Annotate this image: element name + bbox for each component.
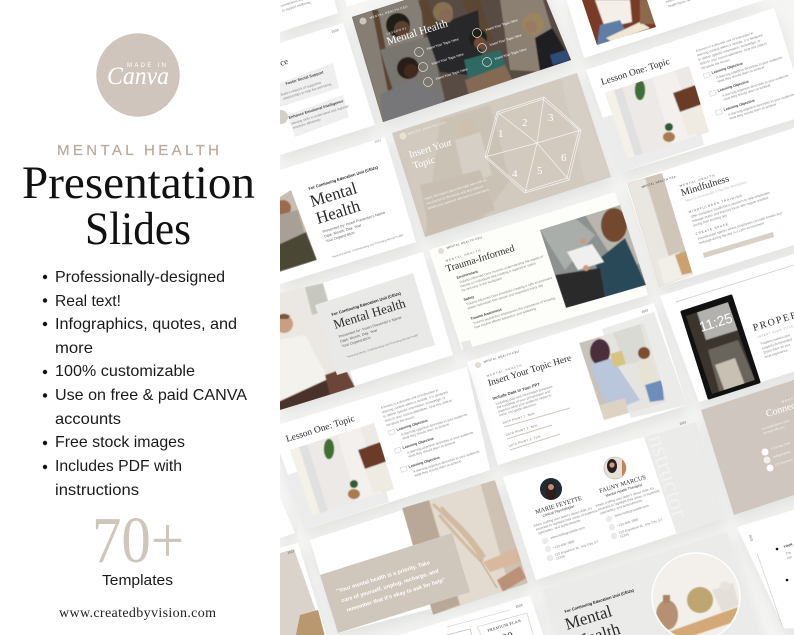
heading	[408, 137, 454, 172]
circular photo	[652, 553, 740, 635]
text block: MINDFULNESS TRAINING	[688, 193, 743, 214]
slide: partial top left	[280, 0, 372, 32]
title text: Presented by: Insert Presenter's Name	[322, 211, 386, 234]
photo: man with book	[582, 0, 656, 45]
grey card: Your Organization	[341, 336, 371, 349]
instructor two: specialties, and achievements.	[600, 498, 644, 515]
feature list: Infographics, quotes, and	[55, 316, 237, 333]
premium plan box	[477, 613, 536, 635]
contact icons: 123 Anywhere	[774, 457, 794, 467]
count: 70+: 70+	[92, 504, 184, 577]
instructor two	[595, 455, 664, 539]
hexagon diagram: 4	[512, 168, 518, 180]
paragraph: learning content within a module. It is designed	[381, 390, 448, 414]
faded photo background	[420, 76, 568, 237]
text block: during their working day	[693, 213, 728, 228]
learning objectives: Learning Objective	[711, 62, 743, 75]
logo	[400, 132, 406, 140]
learning objectives: A learning objective describes to your audience	[407, 430, 474, 455]
paragraph: A lesson is a discrete unit of instruction in	[695, 31, 754, 53]
instructor two: 12345	[619, 532, 629, 539]
learning objectives: Learning Objective	[723, 99, 755, 112]
learning objectives: A learning objective describes to your audience	[728, 92, 794, 117]
instructor one: 123 Anywhere St., Any City, ST	[554, 540, 599, 557]
title text: Mental	[563, 601, 614, 634]
learning objectives: A learning objective describes to your audience	[401, 412, 468, 437]
learning objectives: Learning Objective	[396, 419, 428, 432]
title text: "Nurturing Minds: Understanding and Promoting Mental Health"	[331, 233, 404, 259]
body text: Trauma-Informed Care involves understanding the impact of	[459, 254, 544, 284]
slide: mental health with circle photo	[542, 532, 762, 635]
card: enhance emotional intelligence: Develop skills to understand and regulate	[290, 104, 349, 126]
grey card: "Nurturing Minds: Understanding and Promoting Mental Health"	[346, 333, 419, 359]
card: foster social support	[280, 63, 339, 107]
slide: bullets partial right: can	[786, 555, 793, 560]
slide: small partial left	[280, 498, 295, 538]
slide: phone mockup property	[660, 252, 794, 402]
slide: insert your topic with photo: 2023	[641, 308, 649, 314]
slide: insert your topic with photo: MENTAL HEALTH CEU	[483, 349, 520, 364]
grey card: For Continuing Education Unit (CEUs)	[331, 290, 402, 317]
learning objectives: Learning Objective	[717, 80, 749, 93]
instructor two: 123 Anywhere St., Any City, ST	[618, 518, 663, 535]
learning objectives: what they should learn to achieve	[414, 459, 462, 478]
heading: Insert Your	[408, 137, 454, 161]
photo: counselling session	[579, 324, 666, 420]
slide: mental health title with photo: 2023	[374, 138, 382, 144]
photo: woman with glasses	[280, 283, 355, 410]
photo: white room with plant	[290, 423, 394, 516]
learning objectives: A learning objective describes to your audience	[722, 73, 789, 98]
label: templates: Templates	[102, 572, 173, 589]
slide: beige connect: we would love to hear	[761, 419, 790, 431]
slide: quote	[310, 475, 530, 633]
grey card: Date: Month, Day, Year	[340, 328, 379, 344]
paragraph: introduction to the lesson and any relevant	[426, 184, 484, 206]
body text: Trauma Awareness	[470, 307, 502, 321]
text block: MENTAL HEALTH	[679, 173, 716, 188]
paragraph: introduce the lesson.	[386, 415, 416, 428]
data points: DATA POINT 1: 55%	[502, 411, 535, 425]
paragraph: learning content within a module. It is designed	[696, 33, 763, 57]
text block: How to incorporate it into the Workplace	[685, 180, 747, 203]
photo: pampas grass	[400, 475, 530, 620]
title text: Health	[314, 196, 363, 228]
instructor one: essential to highlight their areas of expertise,	[535, 508, 599, 532]
learning objectives: what they should learn to achieve	[408, 440, 456, 459]
topic list: Insert Your Topic Here	[431, 52, 464, 66]
learning objectives: what they should learn to achieve	[723, 83, 771, 102]
data text	[492, 381, 557, 417]
slide: trauma-informed: MENTAL HEALTH CEU	[446, 235, 483, 250]
heading: Mental Health	[385, 17, 450, 48]
slide: beige connect: connect with you	[762, 425, 785, 435]
feature list: Professionally-designed	[55, 269, 225, 286]
slide: beige connect	[701, 378, 794, 515]
data points	[502, 408, 570, 450]
slide: bullets partial right: 2023	[748, 534, 754, 542]
body text: Environment	[456, 269, 479, 280]
slide: bullets partial right: YOUR	[783, 542, 794, 549]
slide: instructors	[503, 420, 724, 580]
card: foster social support: Foster Social Support	[285, 70, 325, 86]
feature list: Includes PDF with	[55, 458, 182, 475]
slide: pricing partial bottom	[350, 595, 548, 635]
card: enhance emotional intelligence: emotions effectively	[292, 117, 322, 130]
learning objectives: Learning Objective	[402, 437, 434, 450]
slide: beige hexagon diagram: MENTAL HEALTH CEU	[407, 120, 446, 136]
body text: trauma on individuals and creating a supportive space	[460, 261, 536, 289]
logo	[475, 362, 481, 368]
photo: woman	[280, 190, 317, 272]
title: local experience.	[764, 348, 789, 359]
heading: Lesson One: Topic	[285, 414, 356, 445]
feature list: 100% customizable	[55, 363, 195, 380]
topic list: Insert Your Topic Here	[426, 37, 459, 51]
instructor one	[533, 478, 600, 561]
heading: Trauma-Informed	[445, 243, 516, 275]
instructor one: www.reallygreatsite.com	[550, 525, 585, 540]
logo	[438, 248, 444, 254]
hexagon diagram: 6	[561, 152, 567, 164]
icon: grey circle	[274, 110, 288, 124]
card: foster social support: Build a network of supportive	[280, 80, 322, 97]
phone: 11:25	[697, 309, 735, 335]
data text: know, and guide decisions.	[499, 402, 538, 417]
contact icons: +123-456-7890	[770, 441, 791, 451]
heading: MENTAL HEALTH	[445, 248, 482, 263]
feature list: more	[55, 340, 93, 357]
slide: beige hexagon diagram	[392, 73, 611, 237]
slide: dark mental health photo	[352, 0, 571, 127]
title	[22, 157, 255, 255]
photo: white room with plant	[605, 66, 709, 159]
slide: dark mental health photo: MENTAL HEALTH CEU	[369, 4, 408, 20]
card: enhance emotional intelligence: Enhance Emotional Intelligence	[288, 99, 344, 120]
data points: DATA POINT 3: 75%	[508, 434, 541, 448]
grey card	[315, 273, 435, 375]
instructor one: 12345	[555, 554, 565, 561]
title text: For Continuing Education Unit (CEUs)	[564, 587, 635, 614]
slide: bedroom partial lower left	[280, 543, 328, 635]
paragraph: A lesson is a discrete unit of instruction in	[380, 388, 439, 410]
paragraph: to deliver specific information, knowledge, or	[698, 38, 762, 62]
learning objectives: what they should learn to achieve	[717, 65, 765, 84]
slide: lesson one topic, lower left	[271, 367, 490, 529]
card: enhance emotional intelligence	[288, 95, 351, 137]
photo: beige interior	[627, 173, 693, 287]
topic list	[414, 18, 527, 87]
logo	[360, 18, 366, 24]
body text: how trauma affects behaviour and wellbeing	[474, 307, 537, 330]
instructor two: essential to highlight their areas of expertise,	[597, 488, 661, 512]
title: property documented	[761, 337, 793, 350]
website: www.createdbyvision.com	[59, 606, 216, 621]
learning objectives: Learning Objective	[408, 456, 440, 469]
quote box: "Your mental health is a priority. Take	[336, 560, 431, 595]
instructor two: When crafting your team's about slide, it's	[595, 486, 655, 508]
instructor two: FAUNY MARCUS	[599, 474, 647, 495]
title text	[308, 164, 404, 259]
learning objectives: A learning objective describes to your audience	[716, 55, 783, 80]
contact icons	[762, 441, 794, 472]
feature list: Real text!	[55, 293, 121, 310]
slide: mindfulness	[620, 126, 794, 290]
feature list: accounts	[55, 411, 121, 428]
feature list: instructions	[55, 482, 139, 499]
quote box: care of yourself, unplug, recharge, and	[341, 568, 440, 604]
paragraph: skills to your course attendees. Give this slide to	[699, 41, 768, 66]
heading: Topic	[412, 154, 437, 172]
data text: Including data and information enhances	[495, 384, 553, 406]
slide: mental health grey card	[275, 252, 453, 415]
badge: made in canva: MADE IN	[127, 63, 166, 69]
text block: manage stress and improve focus with regular practice	[691, 196, 769, 223]
slide: bedroom partial lower left: 2023	[287, 549, 295, 555]
title: Property owners and	[760, 333, 791, 346]
learning objectives: A learning objective describes to your audience	[413, 449, 480, 474]
instructor one: Clinical Psychologist	[542, 504, 575, 518]
instructor two: Mental Health Therapist	[605, 483, 643, 498]
grey card: Presented for: Insert Presenter's Name	[338, 316, 402, 339]
slide: bullets partial right: The	[785, 550, 792, 556]
instructor one: When crafting your team's about slide, it's	[533, 506, 593, 528]
hexagon diagram: 2	[522, 117, 528, 129]
body text	[456, 250, 557, 330]
text block: recharge during the day in a calm environment	[698, 221, 765, 245]
slide: lesson one topic, top right	[586, 8, 794, 172]
body text: Safety	[463, 295, 475, 302]
title text: Date: Month, Day, Year	[324, 223, 363, 239]
learning objectives	[703, 50, 794, 122]
hexagon diagram: 5	[537, 165, 543, 177]
feature list: Free stock images	[55, 434, 185, 451]
slide: instructors: 2023	[679, 420, 687, 426]
learning objectives: what they should learn to achieve	[729, 102, 777, 121]
text block	[679, 173, 784, 245]
text block: CREATE SPACE	[695, 222, 729, 236]
title: Slides	[85, 203, 191, 255]
data text: Include Data in Your PPT	[492, 381, 541, 401]
instructor one: specialties, and achievements.	[538, 518, 582, 535]
heading: Lesson One: Topic	[600, 57, 671, 88]
slide: man reading photo, partial top	[566, 0, 770, 58]
paragraph: to deliver specific information, knowledge, or	[383, 395, 447, 419]
feature list	[43, 269, 247, 499]
slide: resilience cards: 2023	[331, 28, 339, 34]
title text: Your Organization	[325, 231, 355, 244]
text block: Mindfulness	[680, 173, 731, 199]
title: Share them as you	[763, 343, 791, 355]
text block: Provide quiet spaces where employees can take breaks and	[697, 211, 782, 241]
instructor two: +123-456-7890	[616, 517, 639, 528]
slide: mental health title with photo	[275, 137, 416, 284]
slide: bullets partial right	[737, 508, 794, 630]
title	[752, 305, 794, 359]
paragraph	[695, 28, 769, 71]
subtitle: MENTAL HEALTH	[57, 142, 219, 159]
slide: resilience cards: ce	[279, 56, 289, 68]
hexagon diagram	[485, 97, 581, 193]
slide: insert your topic with photo	[467, 303, 687, 465]
topic list: Insert Your Topic Here	[435, 67, 468, 81]
instructor two: www.reallygreatsite.com	[614, 503, 649, 518]
left panel	[0, 0, 280, 635]
grey card: Mental Health	[331, 295, 408, 332]
hexagon diagram: 1	[498, 128, 504, 140]
data text: supports what your audience needs to	[497, 393, 552, 414]
body text: Trauma awareness emphasizes the importance of knowing	[473, 296, 556, 325]
paragraph	[380, 385, 454, 428]
hexagon diagram: 3	[548, 112, 554, 124]
body text: for recovery in the workplace	[461, 276, 503, 293]
slide: mindfulness: MENTAL HEALTH CEA	[641, 174, 677, 189]
card: foster social support: relationships to help the well-being	[282, 82, 332, 101]
heading: MENTAL HEALTH	[486, 363, 523, 378]
collage background	[280, 0, 794, 635]
paragraph	[424, 178, 490, 211]
title text: Mental	[308, 178, 359, 211]
data points: DATA POINT 2: 60%	[505, 423, 538, 437]
quote box	[320, 533, 470, 633]
phone	[680, 295, 760, 400]
topic list: Insert Your Topic Here	[485, 18, 518, 32]
learning objectives: what they should learn to achieve	[402, 422, 450, 441]
slide: resilience cards	[274, 23, 375, 155]
paragraph: Insert information about the topic here with an	[424, 178, 487, 201]
title text	[563, 587, 635, 635]
topic list: Insert Your Topic Here	[494, 47, 527, 61]
slide: pricing partial bottom: 2023	[515, 603, 523, 609]
beige bar	[703, 232, 774, 258]
topic list: Insert Your Topic Here	[489, 33, 522, 47]
photo: person writing on clipboard	[540, 205, 646, 308]
title: INSERT YOUR TITLE	[757, 324, 794, 339]
photo: group of people	[352, 0, 571, 122]
slide: dark mental health photo: LESSON 01	[386, 26, 407, 36]
paragraph: details your audience will need to understand.	[427, 187, 490, 211]
quote box: remember that it's okay to ask for help"	[346, 577, 447, 614]
text block: Offer workplace mindfulness sessions to help employees	[690, 190, 771, 219]
badge: made in canva	[96, 33, 180, 117]
instructor one: MARIE FEYETTE	[535, 495, 583, 516]
instructor one: +123-456-7890	[552, 539, 575, 550]
slide: trauma-informed	[429, 192, 650, 352]
title text: For Continuing Education Unit (CEUs)	[308, 164, 379, 191]
badge: made in canva: Canva	[107, 63, 169, 90]
premium plan box: PREMIUM PLAN	[487, 618, 522, 633]
body text: Trauma-Informed Care prioritizes creating a safe environment	[466, 276, 553, 306]
slide: partial top left: to support wellbeing	[282, 0, 311, 13]
learning objectives	[388, 407, 481, 479]
heading: Insert Your Topic Here	[487, 354, 573, 389]
body text: where individuals feel secure and respected every day	[467, 283, 544, 311]
watermark word: Instructor	[640, 424, 692, 521]
paragraph: skills to your course attendees. Give this slide to	[384, 398, 453, 423]
data text: the credibility of your presentation and	[496, 389, 551, 410]
feature list: Use on free & paid CANVA	[55, 387, 247, 404]
contact icons: reallygreatsite	[772, 449, 791, 459]
title: Presentation	[22, 157, 255, 209]
paragraph: introduce the lesson.	[701, 58, 731, 71]
